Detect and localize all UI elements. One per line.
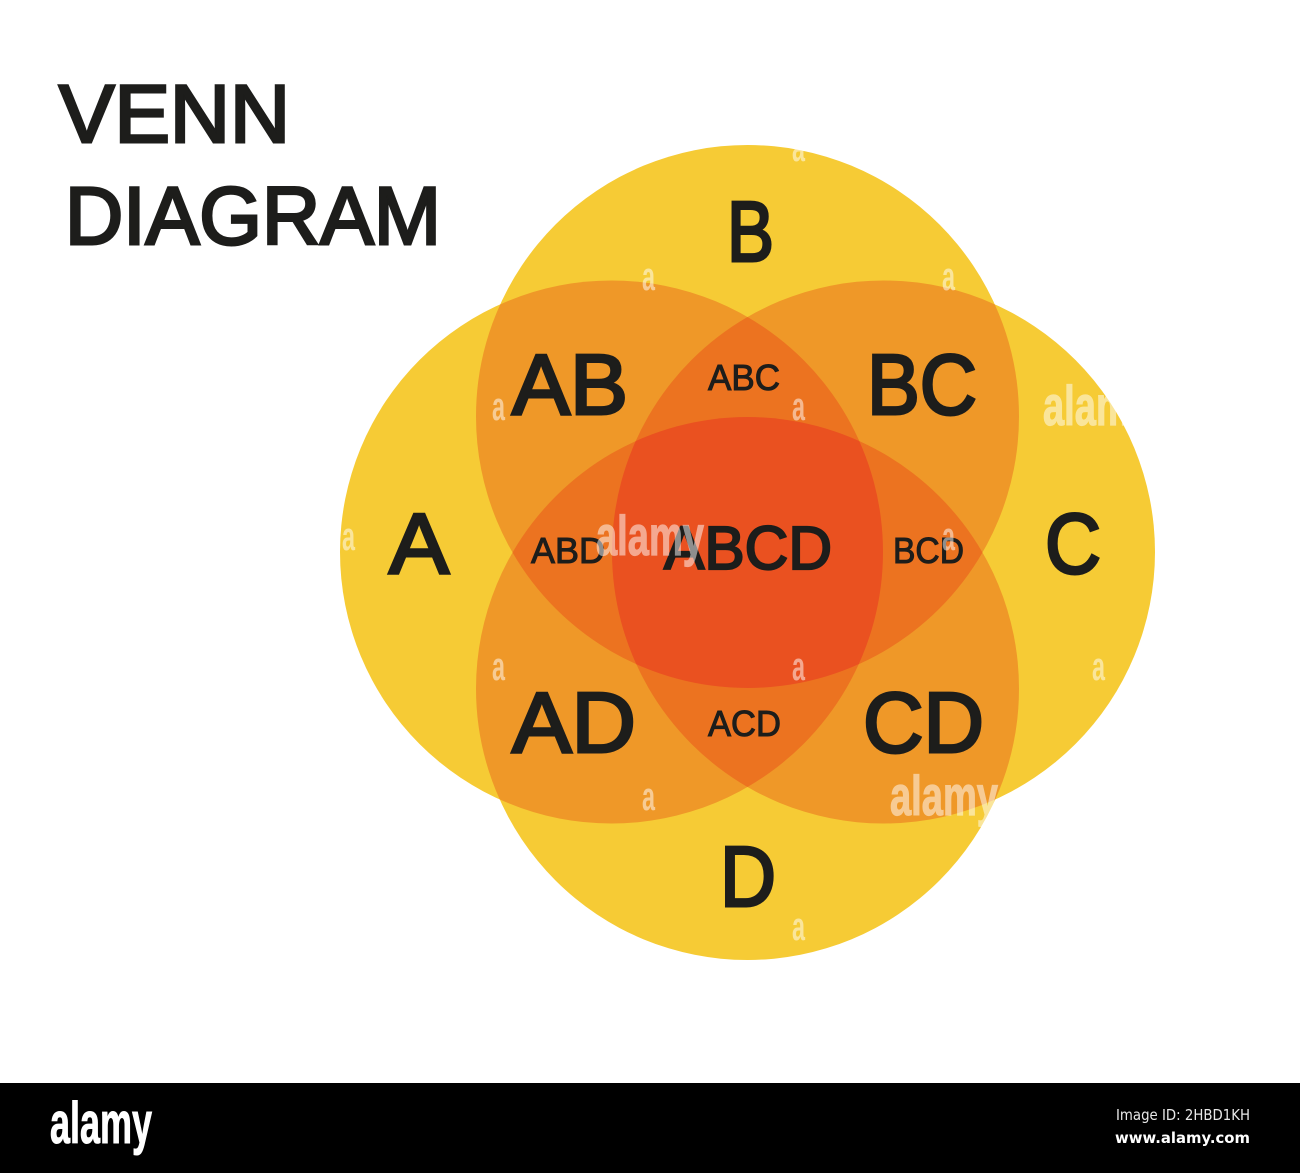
set labels: C bbox=[1045, 497, 1101, 592]
set labels: D bbox=[720, 830, 776, 925]
set labels: B bbox=[727, 185, 774, 280]
watermark: a bbox=[942, 515, 955, 559]
watermark: alamy bbox=[596, 504, 704, 567]
three-set labels: ABD bbox=[531, 530, 605, 571]
two-set labels: CD bbox=[863, 676, 984, 771]
watermark: alamy bbox=[890, 764, 998, 827]
two-set labels: BC bbox=[867, 338, 977, 433]
footer logo: alamy bbox=[50, 1091, 152, 1156]
set circles: A, B, C, D bbox=[340, 145, 1155, 960]
three-set overlaps: ABC, ABD, ACD, BCD bbox=[512, 317, 982, 787]
watermark: a bbox=[492, 385, 505, 429]
three-set labels: ABC bbox=[708, 357, 780, 398]
four-set label: ABCD bbox=[664, 514, 832, 582]
venn diagram bbox=[340, 145, 1155, 960]
set labels: A bbox=[389, 497, 449, 592]
watermark: a bbox=[642, 775, 655, 819]
title: VENN bbox=[59, 69, 290, 160]
three-set labels: BCD bbox=[893, 530, 964, 571]
watermark: a bbox=[792, 905, 805, 949]
watermark: a bbox=[492, 645, 505, 689]
watermark bbox=[342, 126, 1151, 949]
four-set overlap: ABCD bbox=[612, 417, 883, 688]
watermark: a bbox=[792, 385, 805, 429]
two-set labels: AD bbox=[512, 676, 636, 771]
footer bar bbox=[0, 1083, 1300, 1173]
watermark: a bbox=[642, 255, 655, 299]
image id: Image ID: 2HBD1KH bbox=[1116, 1106, 1250, 1124]
title bbox=[59, 69, 441, 262]
watermark: alamy bbox=[1043, 374, 1151, 437]
three-set labels bbox=[531, 357, 964, 744]
watermark: a bbox=[342, 515, 355, 559]
title: DIAGRAM bbox=[65, 171, 441, 262]
two-set overlaps: AB, BC, CD, AD bbox=[476, 280, 1019, 824]
set labels bbox=[389, 185, 1101, 925]
watermark: a bbox=[792, 126, 805, 170]
two-set labels bbox=[512, 338, 984, 771]
watermark: a bbox=[942, 255, 955, 299]
three-set labels: ACD bbox=[708, 703, 781, 744]
website: www.alamy.com bbox=[1115, 1129, 1250, 1147]
watermark: a bbox=[1092, 645, 1105, 689]
two-set labels: AB bbox=[512, 338, 628, 433]
watermark: a bbox=[792, 645, 805, 689]
